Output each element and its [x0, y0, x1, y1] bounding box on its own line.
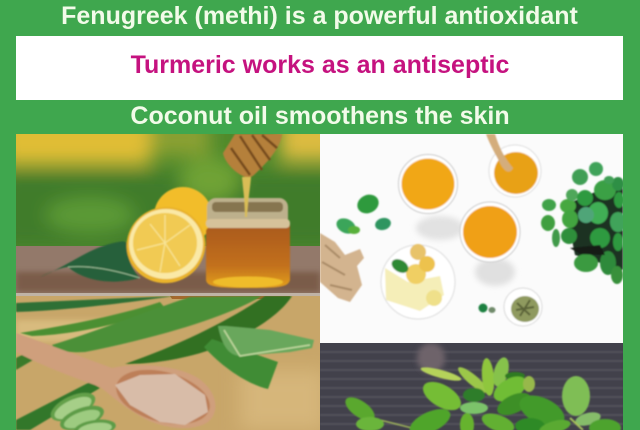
honey drip — [242, 177, 251, 217]
honey dipper — [223, 134, 282, 178]
plate — [381, 245, 455, 319]
wooden spoon — [16, 333, 215, 428]
mint leaves — [356, 194, 380, 214]
plant — [541, 162, 626, 284]
ginger — [320, 233, 364, 302]
aloe slices — [50, 392, 96, 422]
cup 2 — [460, 202, 520, 262]
back lemon — [154, 186, 210, 236]
leaf — [40, 241, 140, 282]
photo: tea and herbs — [320, 134, 626, 343]
aloe main leaf — [52, 296, 262, 352]
photo: lemon and honey — [16, 134, 320, 296]
cardamom bowl — [504, 288, 542, 326]
heading: coconut oil: Coconut oil smoothens the skin — [130, 102, 510, 130]
white band — [16, 36, 623, 100]
table — [16, 246, 320, 296]
jar — [206, 224, 290, 288]
front lemon — [125, 208, 206, 284]
photo: fenugreek leaves — [320, 343, 623, 430]
heading: turmeric: Turmeric works as an antiseptic — [131, 51, 510, 79]
aloe lower leaf — [16, 382, 100, 430]
photo: aloe vera — [16, 296, 325, 430]
heading: fenugreek: Fenugreek (methi) is a powerful antioxidant — [61, 2, 579, 30]
aloe leaf upper — [16, 296, 175, 312]
turmeric bowl — [489, 145, 541, 197]
cup 1 — [398, 154, 458, 214]
leaf cluster — [380, 420, 412, 428]
aloe thin leaf — [20, 302, 165, 336]
aloe right leaf — [125, 296, 292, 364]
aloe cut piece — [204, 339, 278, 389]
